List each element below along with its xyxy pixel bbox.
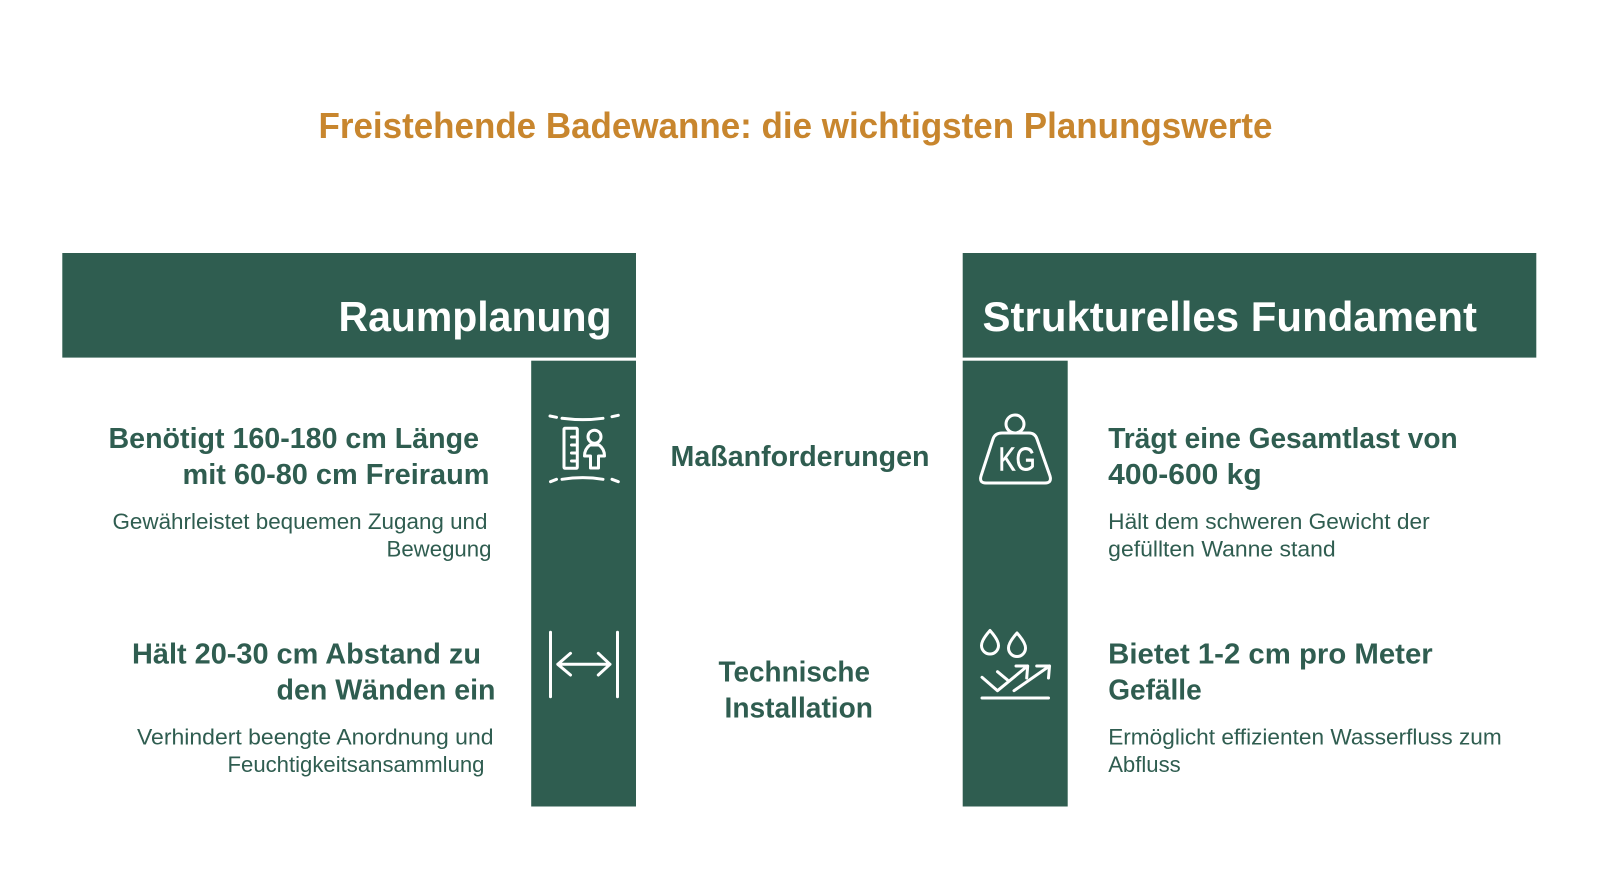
item description: Feuchtigkeitsansammlung bbox=[228, 752, 484, 777]
item description: Abfluss bbox=[1108, 752, 1181, 777]
icon column right bbox=[963, 361, 1068, 806]
item description bbox=[1108, 509, 1430, 562]
icon: kg weight: KG bbox=[998, 440, 1036, 478]
item heading: Bietet 1-2 cm pro Meter bbox=[1108, 638, 1433, 670]
item description bbox=[1108, 724, 1502, 777]
item description bbox=[112, 509, 492, 562]
icon: water drops and slope arrows bbox=[982, 630, 1050, 698]
center label: Technische Installation: Installation bbox=[724, 692, 873, 724]
header: Raumplanung bbox=[62, 253, 636, 358]
icon: ruler and person bbox=[550, 415, 618, 482]
center label: Maßanforderungen: Maßanforderungen bbox=[670, 441, 930, 473]
item description: Ermöglicht effizienten Wasserfluss zum bbox=[1108, 724, 1502, 750]
item: Gefälle bbox=[1108, 638, 1502, 777]
item description: Hält dem schweren Gewicht der bbox=[1108, 509, 1430, 534]
item heading bbox=[132, 638, 496, 706]
item heading: Trägt eine Gesamtlast von bbox=[1108, 423, 1458, 455]
item description: Verhindert beengte Anordnung und bbox=[137, 724, 494, 750]
header: Strukturelles Fundament bbox=[963, 253, 1536, 358]
item heading: 400-600 kg bbox=[1108, 459, 1262, 491]
icon: kg weight bbox=[981, 415, 1050, 483]
item heading: mit 60-80 cm Freiraum bbox=[182, 459, 490, 491]
item: Gesamtlast bbox=[1108, 423, 1458, 562]
item: Länge und Freiraum bbox=[108, 423, 492, 562]
center label: Technische Installation bbox=[718, 656, 873, 724]
item heading bbox=[108, 423, 490, 491]
item heading: Gefälle bbox=[1108, 674, 1202, 706]
item heading bbox=[1108, 638, 1433, 706]
panel: Strukturelles Fundament bbox=[963, 253, 1536, 806]
header: Strukturelles Fundament: Strukturelles Fundament bbox=[982, 293, 1477, 340]
title: Freistehende Badewanne: die wichtigsten Planungswerte bbox=[318, 105, 1272, 146]
item description: Bewegung bbox=[386, 536, 492, 562]
center label: Technische Installation: Technische bbox=[718, 656, 870, 688]
item description: Gewährleistet bequemen Zugang und bbox=[112, 509, 488, 534]
item heading bbox=[1108, 423, 1458, 491]
item description: gefüllten Wanne stand bbox=[1108, 536, 1336, 562]
item heading: Benötigt 160-180 cm Länge bbox=[108, 423, 479, 455]
header: Raumplanung: Raumplanung bbox=[338, 293, 612, 340]
icon: width arrow between walls bbox=[550, 632, 618, 697]
icon column left bbox=[531, 361, 636, 806]
item description bbox=[137, 724, 494, 777]
panel: Raumplanung bbox=[62, 253, 636, 806]
item heading: den Wänden ein bbox=[276, 674, 496, 706]
item heading: Hält 20-30 cm Abstand zu bbox=[132, 638, 481, 670]
item: Wandabstand bbox=[132, 638, 496, 777]
